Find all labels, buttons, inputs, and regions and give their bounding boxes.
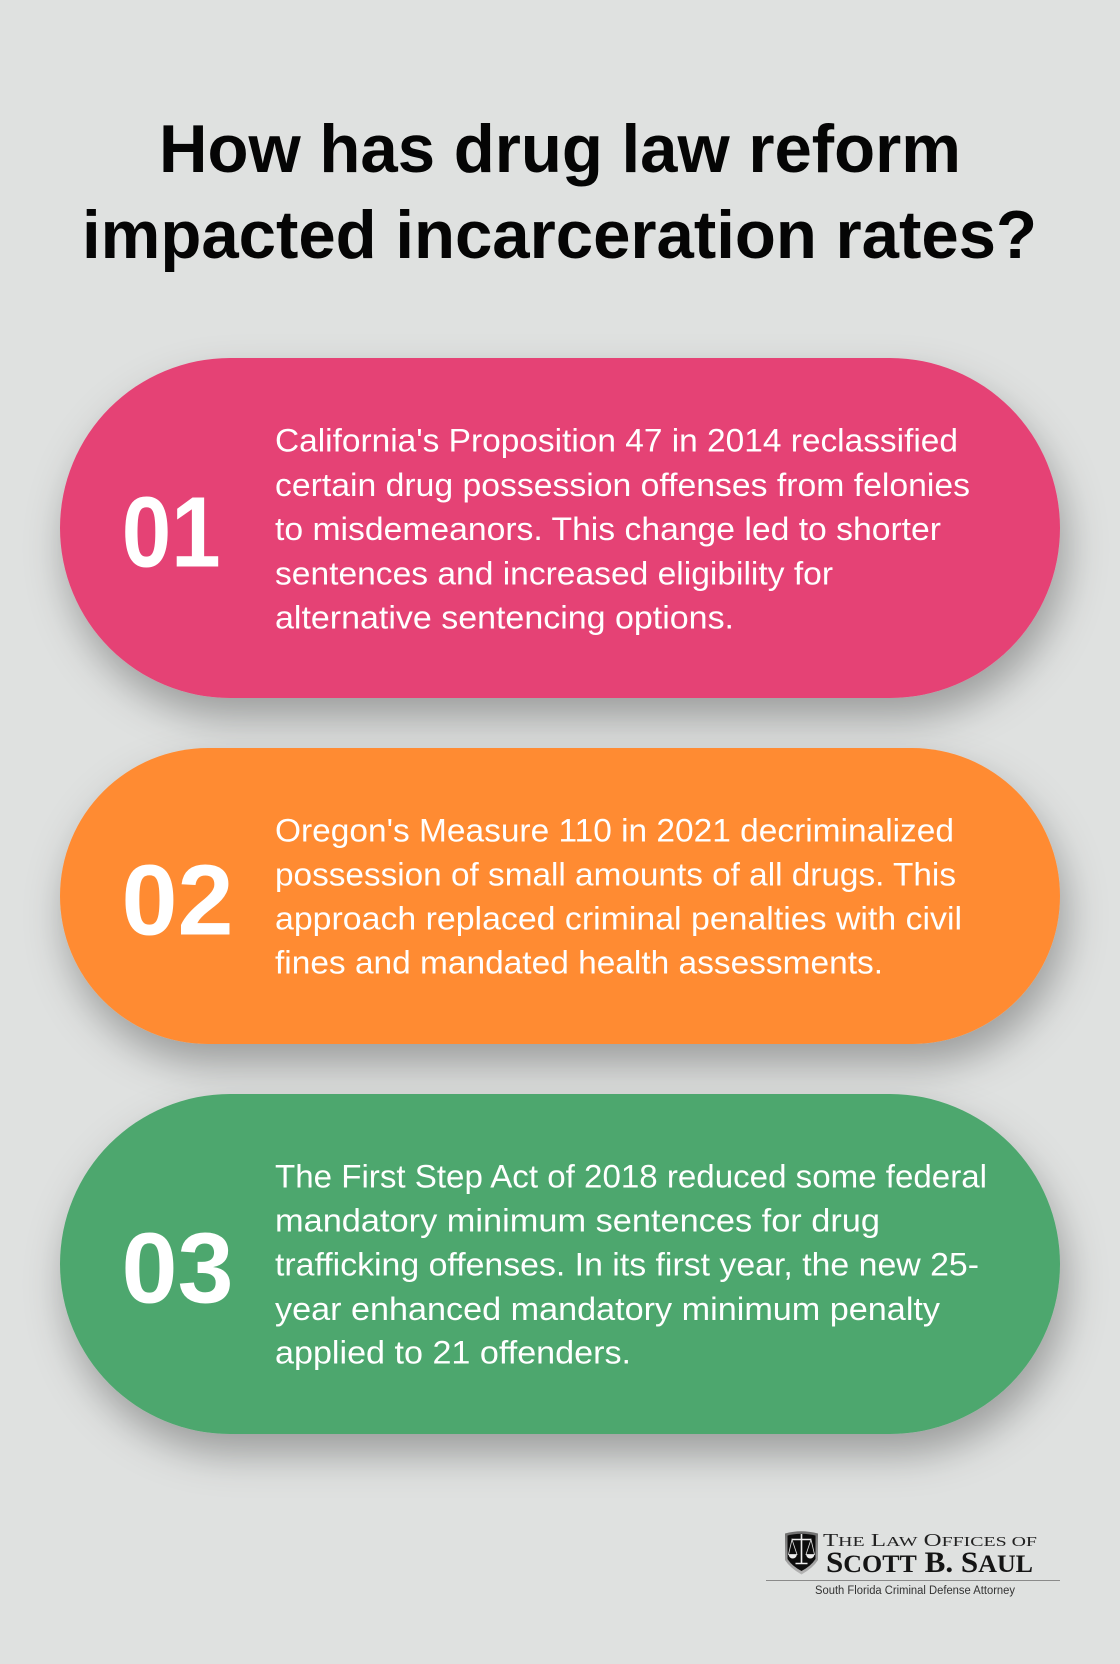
logo: The Law Offices of Scott B. Saul	[766, 1530, 1060, 1597]
icon: shield with scales	[785, 1531, 818, 1574]
text block: First Step Act	[275, 1158, 987, 1370]
title	[82, 111, 1037, 273]
text block: California: to misdemeanors. This change led to shorter	[275, 511, 941, 547]
text block: Oregon: approach replaced criminal penalties with civil	[275, 900, 962, 936]
panel: 02 Oregon Measure 110	[60, 748, 1060, 1044]
text block: Oregon: Oregon's Measure 110 in 2021 decriminalized	[275, 812, 954, 848]
text block: First Step Act: trafficking offenses. In its first year, the new 25-	[275, 1246, 979, 1282]
title: How has drug law reform	[159, 111, 961, 187]
logo: The Law Offices of Scott B. Saul: SCOTT B. SAUL	[826, 1546, 1033, 1579]
text block: First Step Act: applied to 21 offenders.	[275, 1334, 631, 1370]
text block: California: California's Proposition 47 in 2014 reclassified	[275, 422, 958, 458]
text block: California: sentences and increased eligibility for	[275, 556, 833, 592]
text block: California: alternative sentencing options.	[275, 600, 734, 636]
text block: Oregon	[275, 812, 962, 980]
panel: 02 Oregon Measure 110: 02	[122, 844, 234, 956]
logo: The Law Offices of Scott B. Saul: South Florida Criminal Defense Attorney	[815, 1585, 1015, 1597]
title: impacted incarceration rates?	[82, 197, 1037, 273]
text block: First Step Act: year enhanced mandatory minimum penalty	[275, 1291, 940, 1327]
panel: 01 California Proposition 47: 01	[122, 476, 221, 588]
text block: California: certain drug possession offenses from felonies	[275, 467, 970, 503]
logo: The Law Offices of Scott B. Saul: T HE L AW O FFICES OF	[823, 1530, 1037, 1550]
panel: 01 California Proposition 47	[60, 358, 1060, 698]
text block: First Step Act: mandatory minimum sentences for drug	[275, 1202, 880, 1238]
text block: Oregon: possession of small amounts of all drugs. This	[275, 856, 956, 892]
text block: First Step Act: The First Step Act of 2018 reduced some federal	[275, 1158, 987, 1194]
text block: Oregon: fines and mandated health assessments.	[275, 944, 883, 980]
panel: 03 First Step Act	[60, 1094, 1060, 1434]
text block: California	[275, 422, 970, 636]
panel: 03 First Step Act: 03	[122, 1212, 234, 1324]
